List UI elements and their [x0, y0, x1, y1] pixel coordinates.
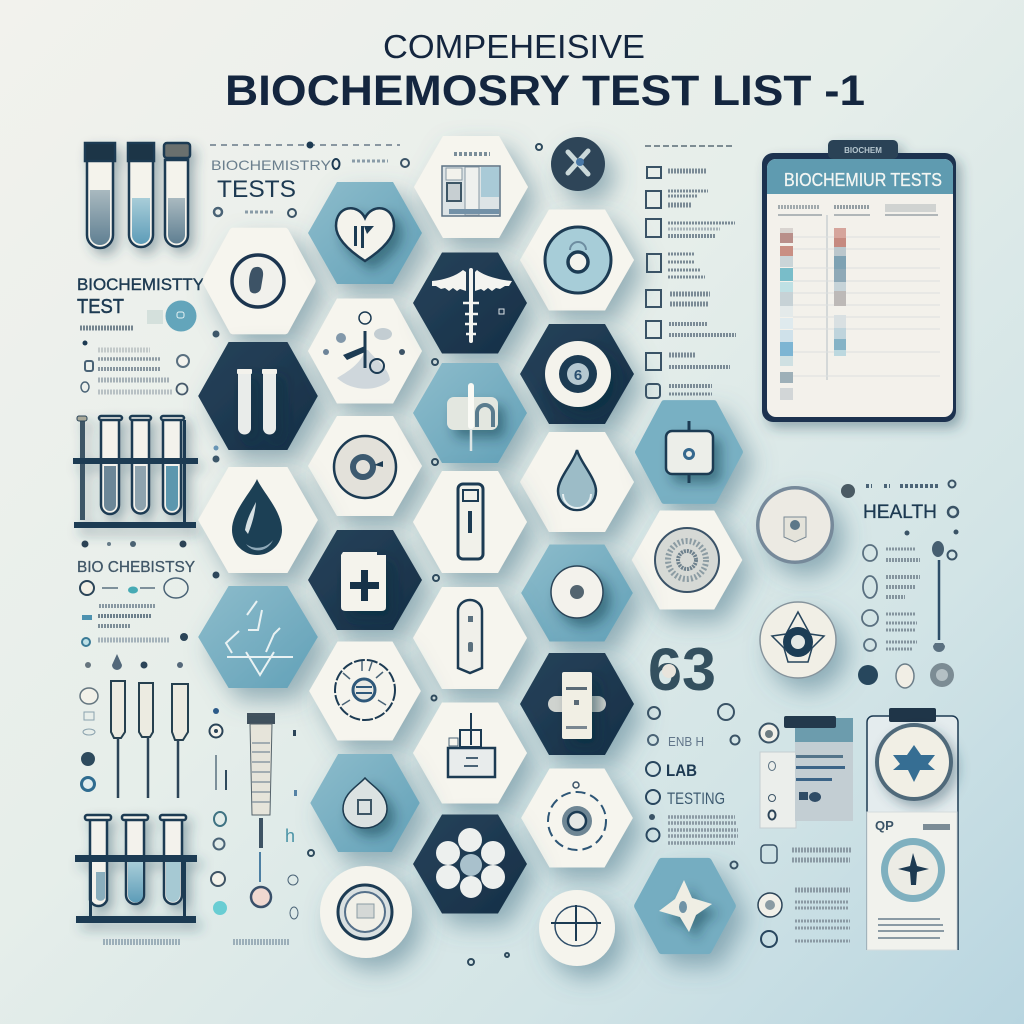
text block: health: [841, 480, 958, 652]
table: header rows: [778, 207, 940, 380]
hexagon panel: blood drop icon: [198, 467, 318, 573]
text block: lab testing: TESTING: [667, 789, 725, 808]
text block: biochemistry lower left: BIO CHEBISTSY: [77, 559, 195, 576]
title: [225, 28, 865, 115]
icon: round compass disc: [539, 890, 615, 966]
hexagon panel: apparatus icon: [308, 298, 422, 404]
hexagon panel: teal ring icon: [520, 210, 634, 310]
icon: round disc with square: [320, 866, 412, 958]
text block: biochemistry test left: TEST: [77, 296, 124, 318]
table: colour swatches left: [780, 228, 793, 400]
heading: biochemistry tests top: BIOCHEMISTRY: [211, 157, 332, 173]
icons: three small circles: [858, 663, 954, 688]
icon: long pipette strip: [210, 708, 298, 942]
hexagon panel: white device dark: [520, 653, 634, 755]
text block: lab testing: LAB: [666, 761, 697, 780]
hexagon panel: lab machine icon: [414, 136, 528, 238]
panel: report card left: [758, 716, 853, 947]
table: colour swatches middle: [834, 228, 846, 356]
panel: emblem card: QP: [875, 818, 894, 833]
text block: health: HEALTH: [863, 502, 937, 523]
icon: test tube rack two: [75, 815, 197, 923]
hexagon panel: cells icon: [413, 815, 527, 913]
hexagon panel: drop badge teal: [310, 754, 420, 852]
heading: biochemistry tests top: TESTS: [217, 176, 296, 203]
hexagon panel: test strip icon: [413, 471, 527, 573]
hexagon panel: capsule icon: [413, 587, 527, 689]
hexagon panel: analyzer icon: [413, 703, 527, 803]
icon: three test tubes top left: [85, 143, 190, 248]
icon: three pipettes: [80, 681, 188, 798]
text block: biochemistry test left: BIOCHEMISTTY: [77, 275, 204, 294]
title: COMPEHEISIVE: [383, 28, 645, 65]
icon: dark circle top: [551, 137, 605, 191]
hexagon panel: square device teal: [638, 403, 740, 501]
text block: lab testing: ENB H: [668, 734, 704, 749]
title: BIOCHEMOSRY TEST LIST -1: [225, 67, 865, 115]
panel: biochemistry tests clipboard: BIOCHEM: [844, 146, 882, 155]
hexagon panel: ring on dark icon: 6: [574, 367, 582, 384]
hexagon panel: star teal: [638, 862, 732, 950]
text block: lab testing: [646, 704, 740, 868]
icon: long pipette strip: h: [285, 826, 295, 846]
hexagon panel: plus icon: [308, 530, 422, 630]
text block: numbered list center right: [645, 146, 736, 398]
hexagon panel: test tubes icon: [198, 342, 318, 450]
hexagon panel: flower icon: [309, 642, 421, 740]
icons: row of small dots under rack: [82, 540, 186, 548]
panel: biochemistry tests clipboard: [762, 140, 956, 422]
hexagon panel: teal disc icon: [521, 545, 633, 641]
panel: emblem card: [867, 708, 958, 950]
hexagon panel: drop icon small: [520, 432, 634, 532]
icon: ring lens: [756, 486, 834, 564]
text block: biochemistry lower left: [77, 559, 220, 670]
icon: number glyph: 63: [648, 636, 716, 703]
heading: biochemistry tests top: [210, 142, 409, 217]
text block: biochemistry test left: [77, 275, 220, 462]
hexagon panel: rosette icon: [521, 769, 633, 867]
hexagon panel: ring on dark icon: [520, 324, 634, 424]
panel: biochemistry tests clipboard: BIOCHEMIUR TESTS: [784, 170, 942, 190]
caption lines under rack: [103, 939, 180, 945]
hexagon panel: fingerprint disc: [632, 511, 742, 609]
hexagon panel: kidney icon: [207, 232, 311, 330]
hexagon panel: round gauge icon: [308, 416, 422, 516]
hexagon panel: lotus outline icon: [198, 586, 318, 688]
hexagon panel: letter-shaped icon: [413, 363, 527, 463]
icon: test tube rack: [73, 416, 198, 528]
hexagon panel: heart icon: [308, 182, 422, 284]
hexagon panel: caduceus icon: [413, 253, 527, 353]
decorative dots between hexagons: [308, 144, 542, 965]
icon: star badge: [760, 602, 836, 678]
